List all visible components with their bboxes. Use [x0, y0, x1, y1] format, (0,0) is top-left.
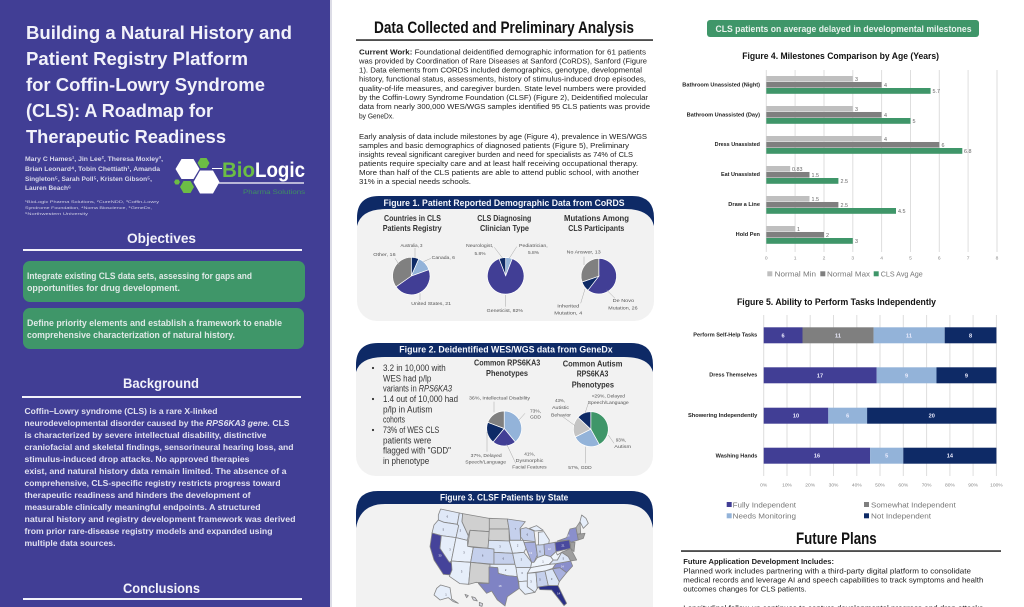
- chart: figure 4 milestones: 2.5: [840, 203, 848, 209]
- text: early analysis: samples and basic demographics of diagnosed patients (Figure 5), Preliminary: [359, 141, 629, 150]
- heading: data collected: Data Collected and Preliminary Analysis: [374, 19, 634, 37]
- panel: figure 1: [357, 196, 654, 321]
- map: US states: 5: [563, 556, 565, 560]
- chart: RPS6KA3 phenotypes pie: Speech/Language: [465, 459, 506, 465]
- text: current work: by GeneDx.: [359, 111, 394, 120]
- figure 2 title: Figure 2. Deidentified WES/WGS data from GeneDx: [399, 344, 613, 356]
- figure 3 title: Figure 3. CLSF Patients by State: [440, 492, 568, 504]
- callout: developmental milestones: CLS patients on average delayed in developmental milestones: [716, 24, 972, 35]
- chart: figure 5 independence: 11: [906, 333, 912, 339]
- chart: clinician type pie: 5.8%: [528, 250, 540, 256]
- chart: RPS6KA3 phenotypes pie: 36%, Intellectual Disability: [469, 395, 531, 401]
- chart: figure 5 independence: 6: [846, 414, 849, 420]
- chart: autism RPS6KA3 phenotypes pie: Common Autism: [563, 359, 622, 369]
- chart: countries pie: Australia, 3: [400, 243, 423, 249]
- bullet list: 73% of WES CLS: [383, 425, 439, 436]
- chart: autism RPS6KA3 phenotypes pie: [551, 359, 631, 471]
- chart: figure 4 milestones: Draw a Line: [728, 202, 760, 208]
- map: US states: [430, 509, 588, 606]
- chart: countries pie: Canada, 6: [432, 255, 455, 261]
- chart: figure 5 independence: 50%: [875, 482, 886, 488]
- figure 5 title: Figure 5. Ability to Perform Tasks Independently: [737, 297, 937, 307]
- chart: RPS6KA3 phenotypes pie: 73%,: [530, 409, 541, 415]
- chart: figure 4 milestones: 7: [967, 256, 970, 262]
- logo: BioLogic: Pharma Solutions: [243, 189, 306, 196]
- chart: autism RPS6KA3 phenotypes pie: 93%,: [616, 438, 626, 444]
- title: (CLS): A Roadmap for: [26, 100, 213, 121]
- chart: figure 5 independence: 20: [929, 414, 935, 420]
- legend: figure 4: [767, 270, 923, 278]
- bullet list: in phenotype: [383, 456, 429, 467]
- chart: figure 4 milestones: 4: [884, 113, 887, 119]
- text: current work: [358, 48, 650, 120]
- chart: autism RPS6KA3 phenotypes pie: 43%,: [555, 398, 565, 404]
- logo: BioLogic: Bio: [222, 159, 255, 182]
- chart: figure 5 independence: 100%: [990, 482, 1003, 488]
- chart: RPS6KA3 phenotypes pie: Facial Features: [512, 465, 547, 471]
- map: US states: 13: [529, 551, 533, 555]
- map: US states: 3: [521, 557, 523, 561]
- background text: therapeutic readiness and hinders the development of: [24, 490, 251, 500]
- chart: figure 5 independence: 14: [947, 454, 954, 460]
- chart: RPS6KA3 phenotypes pie: Common RPS6KA3: [474, 358, 541, 368]
- map: US states: 6: [503, 557, 505, 561]
- affiliations: [25, 200, 159, 216]
- chart: countries pie: United States, 21: [411, 301, 451, 307]
- text: early analysis: More than half of the CLS patients are able to attend public school, with another: [359, 168, 639, 177]
- chart: figure 4 milestones: Eat Unassisted: [721, 172, 760, 178]
- chart: countries pie: Other, 16: [373, 252, 396, 258]
- chart: figure 5 independence: 10: [793, 414, 799, 420]
- chart: mutations pie: CLS Participants: [568, 223, 625, 233]
- legend: figure 5: Needs Monitoring: [733, 511, 796, 520]
- map: US states: 3: [461, 570, 463, 574]
- chart: figure 4 milestones: 8: [996, 256, 999, 262]
- map: US states: 1: [445, 593, 447, 597]
- affiliations: ⁶Northwestern University: [25, 212, 88, 216]
- chart: autism RPS6KA3 phenotypes pie: 57%, GDD: [568, 465, 592, 471]
- text: current work: history, functional status, assessments, history of stimulus-induced drop episodes,: [359, 75, 646, 84]
- heading: conclusions: Conclusions: [123, 580, 200, 596]
- chart: figure 5 independence: 11: [835, 333, 841, 339]
- chart: clinician type pie: CLS Diagnosing: [477, 213, 531, 223]
- chart: figure 5 independence: 20%: [805, 482, 816, 488]
- map: US states: 7: [515, 527, 517, 531]
- chart: mutations pie: Mutation, 26: [608, 305, 638, 311]
- chart: figure 4 milestones: 5: [909, 256, 912, 262]
- text: current work: data from nearly 300,000 WES/WGS samples identified 95 CLS patients was provide: [359, 102, 650, 111]
- map: US states: 21: [562, 543, 565, 547]
- chart: countries pie: Countries in CLS: [384, 213, 441, 223]
- legend: figure 5: Somewhat Independent: [871, 500, 956, 509]
- background text: is characterized by severe intellectual disability, distinctive: [24, 430, 267, 440]
- legend: figure 5: Not Independent: [871, 511, 931, 520]
- chart: figure 5 independence: 16: [814, 454, 820, 460]
- chart: clinician type pie: Clinician Type: [480, 223, 529, 233]
- chart: RPS6KA3 phenotypes pie: 41%,: [524, 451, 535, 457]
- chart: figure 4 milestones: 3: [855, 107, 858, 113]
- legend: figure 4: Normal Max: [827, 270, 870, 278]
- background text: [24, 406, 296, 548]
- title: for Coffin-Lowry Syndrome: [26, 74, 265, 95]
- chart: figure 5 independence: Washing Hands: [716, 454, 758, 460]
- map: US states: 3: [521, 571, 523, 575]
- legend: figure 4: CLS Avg Age: [881, 270, 923, 278]
- chart: RPS6KA3 phenotypes pie: GDD: [530, 414, 541, 420]
- bullet list: 1.4 out of 10,000 had: [383, 394, 458, 405]
- chart: figure 5 independence: 6: [782, 333, 785, 339]
- logo: BioLogic: [174, 158, 306, 196]
- chart: mutations pie: Mutation, 4: [554, 311, 583, 317]
- map: US states: 1: [542, 559, 544, 563]
- chart: mutations pie: Inherited: [557, 303, 580, 309]
- text: early analysis: 31% in a special needs schools.: [359, 177, 471, 186]
- background text: neurodevelopmental disorder caused by the RPS6KA3 gene. CLS: [24, 418, 290, 428]
- bullet list: flagged with "GDD": [383, 446, 451, 457]
- heading: future plans: Future Plans: [796, 530, 877, 548]
- chart: figure 4 milestones: 3: [851, 256, 854, 262]
- text: early analysis: patients require specialty care and at least half receiving occupational therapy.: [359, 159, 638, 168]
- chart: figure 5 independence: 80%: [945, 482, 955, 488]
- legend: figure 5: Fully Independent: [733, 500, 796, 509]
- callout: developmental milestones: [707, 20, 979, 37]
- text: current work: by the Coffin-Lowry Syndrome Foundation (CLSF) (Figure 2), Deidentified molecular: [359, 93, 648, 102]
- authors: Lauren Beach⁶: [25, 185, 71, 192]
- text: future plans: [683, 557, 983, 607]
- chart: clinician type pie: Geneticist, 82%: [487, 308, 524, 314]
- chart: figure 5 independence: 70%: [922, 482, 932, 488]
- title: [26, 22, 292, 147]
- panel: figure 3: [356, 491, 653, 607]
- background text: measurable clinically meaningful endpoints. A structured: [24, 502, 260, 512]
- chart: clinician type pie: Pediatrician,: [519, 243, 548, 249]
- chart: figure 5 independence: 9: [905, 373, 908, 379]
- figure 4 title: Figure 4. Milestones Comparison by Age (Years): [742, 51, 939, 61]
- panel: left sidebar: [0, 0, 332, 607]
- background text: comprehensive, CLS-specific registry restricts progress toward: [24, 478, 280, 488]
- map: US states: 5: [443, 528, 445, 532]
- chart: figure 4 milestones: 2.5: [840, 179, 848, 185]
- chart: autism RPS6KA3 phenotypes pie: Behavior: [551, 412, 571, 418]
- chart: figure 5 independence: Dress Themselves: [709, 373, 758, 379]
- map: US states: 6: [482, 554, 484, 558]
- background text: Coffin–Lowry syndrome (CLS) is a rare X-linked: [24, 406, 218, 416]
- text: future plans: Future Application Development Includes:: [683, 557, 834, 566]
- text: current work: quality-of-life measures, and caregiver burden. State level numbers were provided: [359, 84, 646, 93]
- chart: clinician type pie: 5.8%: [474, 251, 486, 257]
- chart: RPS6KA3 phenotypes pie: [465, 358, 547, 471]
- chart: figure 4 milestones: 4: [884, 83, 887, 89]
- map: US states: 3: [449, 548, 451, 552]
- bullet list: [372, 363, 458, 467]
- chart: figure 5 independence: 0%: [760, 482, 768, 488]
- chart: figure 4 milestones: 3: [855, 77, 858, 83]
- authors: Brian Leonard⁴, Tobin Chettiath¹, Amanda: [25, 166, 160, 173]
- affiliations: Syndrome Foundation, ⁴Noma Bioscience, ⁵GeneDx,: [25, 206, 152, 210]
- chart: figure 4 milestones: 2: [826, 233, 829, 239]
- chart: figure 5 independence: 9: [965, 373, 968, 379]
- chart: figure 4 milestones: 3: [855, 239, 858, 245]
- chart: figure 4 milestones: 1.5: [812, 197, 819, 203]
- chart: figure 4 milestones: 1: [794, 256, 797, 262]
- chart: figure 5 independence: 40%: [852, 482, 862, 488]
- chart: autism RPS6KA3 phenotypes pie: Speech/Language: [588, 400, 629, 406]
- map: US states: 3: [463, 550, 465, 554]
- text: current work: was provided by Coordination of Rare Diseases at Sanford (CoRDS), Sanford (Figure: [358, 56, 647, 66]
- map: US states: 2: [505, 568, 507, 572]
- chart: clinician type pie: Neurologist,: [466, 243, 493, 249]
- chart: figure 4 milestones: 6: [938, 256, 941, 262]
- chart: figure 4 milestones: 0: [765, 256, 768, 262]
- chart: RPS6KA3 phenotypes pie: Dysmorphic: [516, 458, 544, 464]
- chart: autism RPS6KA3 phenotypes pie: Phenotypes: [572, 379, 614, 389]
- authors: Mary C Hames¹, Jin Lee², Theresa Moxley³,: [25, 156, 163, 163]
- chart: countries pie: Patients Registry: [383, 223, 442, 233]
- map: US states: 3: [460, 529, 462, 533]
- chart: figure 5 independence: 30%: [829, 482, 839, 488]
- map: US states: 3: [530, 579, 532, 583]
- chart: figure 4 milestones: 2: [823, 256, 826, 262]
- objective 2: comprehensive characterization of natural history.: [27, 330, 235, 340]
- chart: autism RPS6KA3 phenotypes pie: Autistic: [552, 405, 570, 411]
- logo: BioLogic: Logic: [255, 159, 305, 182]
- chart: figure 4 milestones: 4: [884, 137, 887, 143]
- map: US states: 2: [517, 544, 519, 548]
- text: future plans: Planned work includes partnering with a third-party digital platform to consolidate: [683, 566, 971, 575]
- map: US states: 14: [561, 565, 564, 569]
- chart: mutations pie: Mutations Among: [564, 213, 629, 223]
- map: US states: 5: [539, 577, 541, 581]
- chart: figure 4 milestones: Dress Unassisted: [715, 142, 760, 148]
- chart: figure 4 milestones: 6: [942, 143, 944, 149]
- chart: figure 5 independence: Showering Independently: [688, 413, 758, 419]
- heading: objectives: Objectives: [127, 230, 196, 246]
- chart: mutations pie: [554, 213, 638, 317]
- title: Patient Registry Platform: [26, 48, 248, 69]
- chart: figure 4 milestones: 4: [880, 256, 883, 262]
- chart: figure 5 independence: 90%: [968, 482, 979, 488]
- background text: stimulus-induced drop attacks. No approved therapies: [24, 454, 250, 464]
- bullet list: cohorts: [383, 415, 405, 426]
- chart: figure 5 independence: 17: [817, 373, 823, 379]
- chart: figure 4 milestones: Bathroom Unassisted (Night): [682, 82, 760, 88]
- authors: [25, 156, 163, 192]
- text: future plans: medical records and leverage AI and speech capabilities to track symptoms and health: [683, 575, 983, 584]
- chart: figure 5 independence: Perform Self-Help Tasks: [693, 332, 758, 338]
- chart: clinician type pie: [466, 213, 548, 314]
- bullet list: p/lp in Autism: [383, 404, 432, 415]
- text: early analysis: Early analysis of data include milestones by age (Figure 4), prevalence in WES/WGS: [359, 132, 647, 141]
- chart: figure 4 milestones: [682, 51, 999, 278]
- bullet list: patients were: [383, 435, 431, 446]
- legend: figure 4: Normal Min: [775, 270, 816, 278]
- objective 1: Integrate existing CLS data sets, assessing for gaps and: [27, 271, 252, 281]
- chart: RPS6KA3 phenotypes pie: 37%, Delayed: [471, 453, 502, 459]
- bullet list: WES had p/lp: [383, 373, 431, 384]
- map: US states: 6: [539, 550, 541, 554]
- text: current work: Current Work: Foundational deidentified demographic information for 61 patients: [359, 48, 646, 56]
- chart: figure 4 milestones: 1: [797, 227, 800, 233]
- chart: figure 4 milestones: 0.83: [792, 167, 802, 173]
- map: US states: 16: [567, 534, 570, 538]
- background text: natural history and registry development framework was derived: [24, 514, 296, 524]
- chart: figure 4 milestones: 1.5: [812, 173, 819, 179]
- chart: autism RPS6KA3 phenotypes pie: <29%, Delayed: [592, 393, 625, 399]
- objective 2: [23, 308, 304, 349]
- chart: countries pie: [373, 213, 455, 307]
- chart: RPS6KA3 phenotypes pie: Phenotypes: [486, 368, 528, 378]
- text: future plans: outcomes changes for CLS patients.: [683, 585, 807, 594]
- chart: autism RPS6KA3 phenotypes pie: Autism: [614, 444, 631, 450]
- chart: figure 4 milestones: 6.8: [964, 149, 972, 155]
- text: current work: 1). Data elements from CORDS included demographics, genotype, developmental: [359, 66, 642, 75]
- bullet list: 3.2 in 10,000 with: [383, 363, 446, 374]
- background text: craniofacial and skeletal findings, sensorineural hearing loss, and: [24, 442, 294, 452]
- panel: figure 2: [356, 343, 653, 476]
- objective 1: [23, 261, 305, 302]
- chart: figure 5 independence: 60%: [898, 482, 909, 488]
- chart: figure 5 independence: 8: [969, 333, 972, 339]
- legend: figure 5: [727, 500, 956, 520]
- title: Building a Natural History and: [26, 22, 292, 43]
- map: US states: 3: [499, 545, 501, 549]
- chart: mutations pie: De Novo: [613, 298, 634, 304]
- chart: figure 4 milestones: 4.5: [898, 209, 906, 215]
- chart: figure 4 milestones: 5.7: [932, 89, 940, 95]
- background text: multiple data sources.: [24, 538, 116, 548]
- authors: Singleton⁵, Sarah Poll⁵, Kristen Gibson⁵,: [25, 176, 152, 183]
- map: US states: 14: [557, 591, 561, 595]
- text: early analysis: insights reveal significant caregiver burden and need for specialists as 74% of CLS: [359, 150, 633, 159]
- figure 1 title: Figure 1. Patient Reported Demographic Data from CoRDS: [384, 198, 625, 209]
- map: US states: 18: [499, 584, 502, 588]
- map: US states: 6: [447, 515, 449, 519]
- chart: mutations pie: No Answer, 13: [567, 250, 601, 256]
- title: Therapeutic Readiness: [26, 126, 226, 147]
- background text: exist, and natural history data remain limited. The absence of a: [24, 466, 287, 476]
- map: US states: 3: [551, 577, 553, 581]
- chart: figure 5 independence: [688, 297, 1003, 520]
- chart: figure 5 independence: 10%: [782, 482, 793, 488]
- chart: figure 4 milestones: Bathroom Unassisted (Day): [687, 112, 760, 118]
- heading: background: Background: [123, 375, 199, 391]
- chart: figure 4 milestones: 5: [912, 119, 916, 125]
- map: US states: 12: [548, 547, 551, 551]
- background text: from prior rare-disease registry models and expanded using: [24, 526, 272, 536]
- map: US states: 6: [527, 533, 529, 537]
- chart: figure 5 independence: 5: [885, 454, 888, 460]
- affiliations: ¹BioLogic Pharma Solutions, ²CureNDD, ³Coffin-Lowry: [25, 200, 159, 204]
- bullet list: variants in RPS6KA3: [383, 384, 453, 395]
- map: US states: 30: [439, 554, 442, 558]
- objective 1: opportunities for drug development.: [27, 283, 180, 293]
- text: early analysis: [359, 132, 647, 186]
- chart: autism RPS6KA3 phenotypes pie: RPS6KA3: [577, 369, 609, 379]
- objective 2: Define priority elements and establish a framework to enable: [27, 318, 282, 328]
- chart: figure 4 milestones: Hold Pen: [736, 232, 760, 238]
